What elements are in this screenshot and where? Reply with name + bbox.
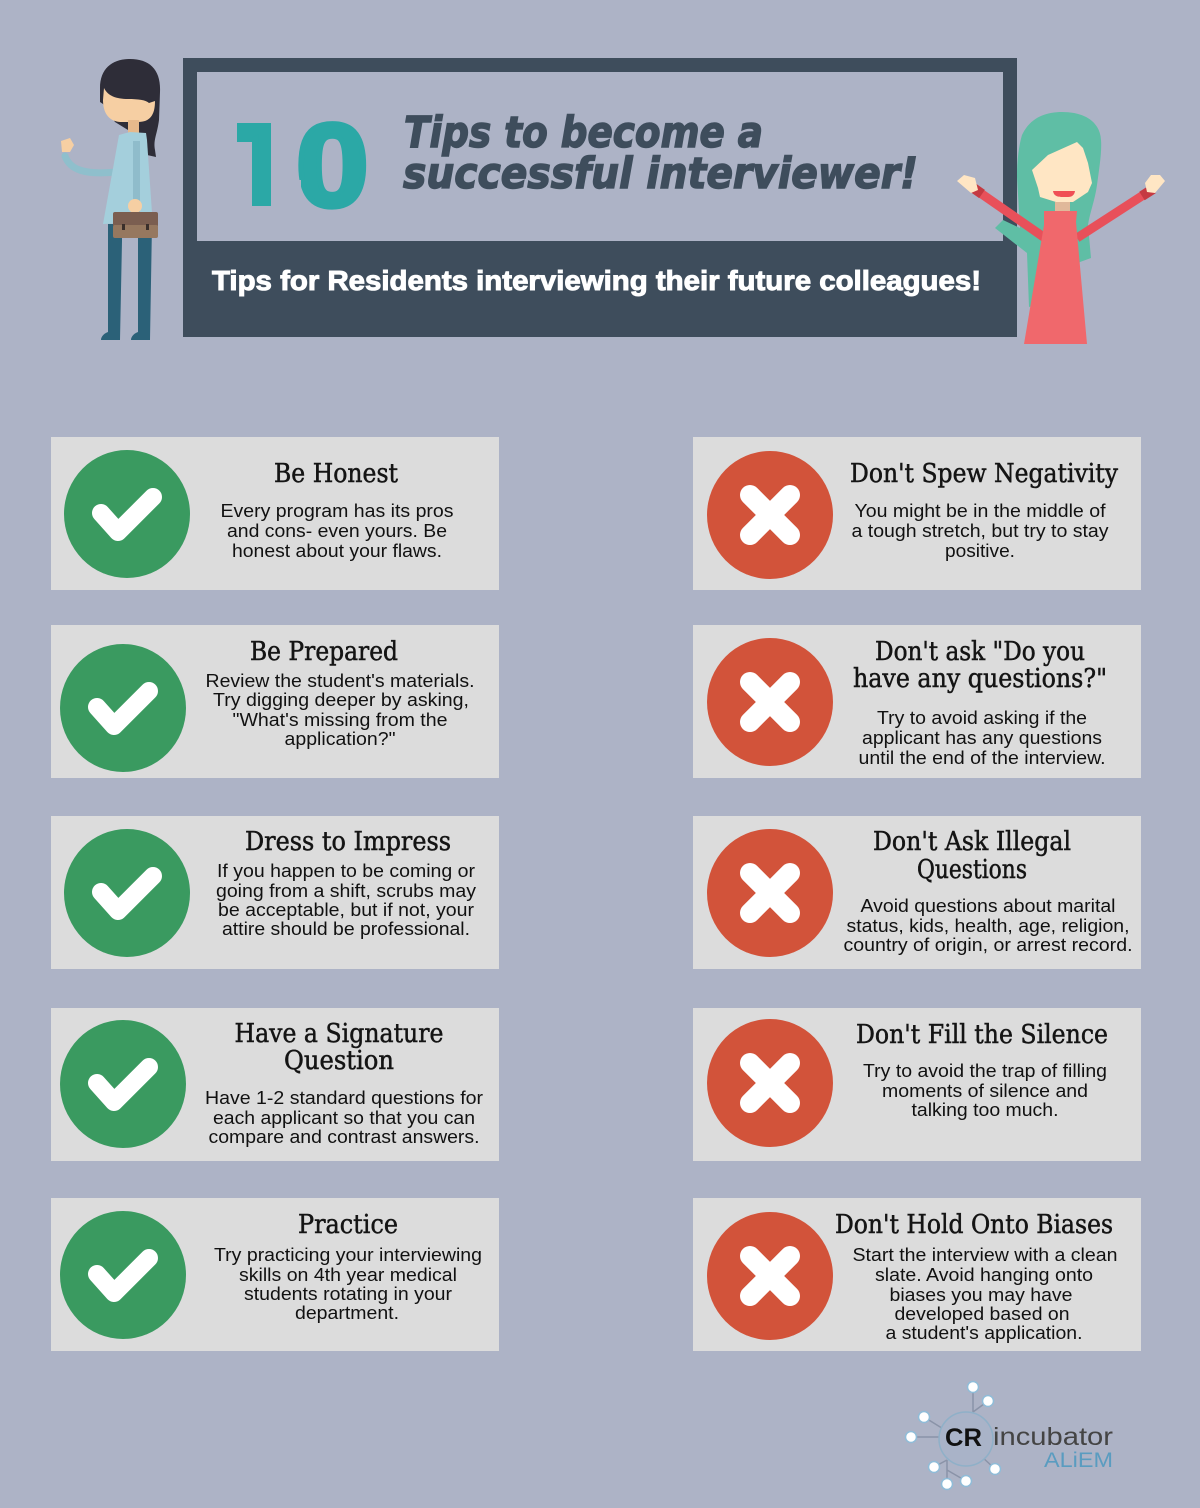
character: woman with briefcase — [61, 59, 160, 340]
tip panel: Don't Hold Onto Biases: developed based on — [894, 1304, 1070, 1324]
tip panel: Don't Ask Illegal Questions: status, kids, health, age, religion, — [846, 916, 1130, 936]
header banner frame — [183, 58, 1017, 337]
logo: CR incubator ALiEM: CR — [945, 1424, 982, 1452]
title text: Tips to become a — [404, 108, 763, 158]
tip panel: Don't ask "Do you have any questions?": Don't ask "Do you — [875, 637, 1085, 667]
tip panel: Don't Spew Negativity: Don't Spew Negativity — [850, 459, 1118, 489]
tip panel: Have a Signature Question: Question — [284, 1046, 394, 1076]
tip panel: Don't ask "Do you have any questions?": until the end of the interview. — [858, 748, 1106, 768]
tip panel: Have a Signature Question: each applicant so that you can — [213, 1108, 475, 1128]
tip panel: Be Honest: Be Honest — [274, 459, 398, 489]
tip panel: Don't Ask Illegal Questions: Questions — [917, 855, 1027, 885]
tip panel: Don't Spew Negativity — [693, 437, 1141, 590]
logo: CR incubator ALiEM — [906, 1382, 1113, 1490]
tip panel: Be Prepared: Try digging deeper by asking, — [213, 690, 469, 710]
tip panel: Dress to Impress: going from a shift, scrubs may — [216, 881, 476, 901]
tip panel: Dress to Impress: be acceptable, but if not, your — [218, 900, 474, 920]
tip panel: Don't Ask Illegal Questions — [693, 816, 1141, 969]
tip panel: Don't Fill the Silence: talking too much. — [912, 1100, 1058, 1120]
tip panel: Don't Fill the Silence: Don't Fill the Silence — [856, 1020, 1108, 1050]
tip panel: Practice — [51, 1198, 499, 1351]
tip panel: Be Honest: and cons- even yours. Be — [227, 521, 447, 541]
title text: successful interviewer! — [403, 149, 918, 199]
tip panel: Dress to Impress — [51, 816, 499, 969]
tip panel: Don't ask "Do you have any questions?": have any questions?" — [853, 664, 1107, 694]
logo: CR incubator ALiEM: incubator — [993, 1423, 1113, 1451]
tip panel: Don't Hold Onto Biases — [693, 1198, 1141, 1351]
tip panel: Practice: skills on 4th year medical — [239, 1265, 457, 1285]
tip panel: Don't Ask Illegal Questions: country of origin, or arrest record. — [844, 935, 1132, 955]
tip panel: Have a Signature Question — [51, 1008, 499, 1161]
tip panel: Don't Hold Onto Biases: Don't Hold Onto Biases — [835, 1210, 1113, 1240]
title number 10: 10 — [225, 100, 369, 232]
tip panel: Don't Spew Negativity: positive. — [945, 541, 1015, 561]
subtitle: Tips for Residents interviewing their future colleagues! — [212, 265, 981, 296]
logo: CR incubator ALiEM: ALiEM — [1044, 1449, 1113, 1472]
tip panel: Have a Signature Question: Have a Signature — [234, 1019, 444, 1049]
tip panel: Don't Hold Onto Biases: a student's application. — [886, 1323, 1082, 1343]
tip panel: Don't Fill the Silence — [693, 1008, 1141, 1161]
tip panel: Be Prepared: Be Prepared — [250, 637, 398, 667]
tip panel: Practice: students rotating in your — [244, 1284, 452, 1304]
tip panel: Don't Fill the Silence: Try to avoid the trap of filling — [863, 1061, 1107, 1081]
tip panel: Be Honest: honest about your flaws. — [232, 541, 442, 561]
title number 10 — [237, 121, 366, 210]
tip panel: Be Prepared: application?" — [284, 729, 396, 749]
tip panel: Be Prepared: Review the student's materials. — [206, 671, 474, 691]
tip panel: Don't Hold Onto Biases: Start the interview with a clean — [852, 1245, 1118, 1265]
character: woman cheering — [957, 112, 1165, 344]
tip panel: Practice: department. — [295, 1303, 399, 1323]
tip panel: Don't ask "Do you have any questions?": applicant has any questions — [862, 728, 1102, 748]
tip panel: Don't Ask Illegal Questions: Avoid questions about marital — [860, 896, 1116, 916]
tip panel: Be Prepared: "What's missing from the — [232, 710, 448, 730]
tip panel: Don't Spew Negativity: You might be in the middle of — [854, 501, 1107, 521]
tip panel: Be Honest — [51, 437, 499, 590]
tip panel: Don't ask "Do you have any questions?": Try to avoid asking if the — [877, 708, 1087, 728]
tip panel: Be Prepared — [51, 625, 499, 778]
title text — [403, 108, 918, 199]
tip panel: Don't ask "Do you have any questions?" — [693, 625, 1141, 778]
tip panel: Don't Ask Illegal Questions: Don't Ask Illegal — [873, 827, 1071, 857]
tip panel: Don't Hold Onto Biases: biases you may have — [890, 1285, 1072, 1305]
tip panel: Don't Fill the Silence: moments of silence and — [882, 1081, 1088, 1101]
tip panel: Don't Spew Negativity: a tough stretch, but try to stay — [852, 521, 1108, 541]
tip panel: Have a Signature Question: Have 1-2 standard questions for — [205, 1088, 483, 1108]
tip panel: Have a Signature Question: compare and contrast answers. — [208, 1127, 480, 1147]
tip panel: Practice: Practice — [298, 1210, 398, 1240]
tip panel: Practice: Try practicing your interviewing — [214, 1245, 482, 1265]
tip panel: Be Honest: Every program has its pros — [220, 501, 454, 521]
tip panel: Dress to Impress: attire should be professional. — [222, 919, 470, 939]
tip panel: Dress to Impress: If you happen to be coming or — [217, 861, 475, 881]
tip panel: Don't Hold Onto Biases: slate. Avoid hanging onto — [875, 1265, 1093, 1285]
tip panel: Dress to Impress: Dress to Impress — [245, 827, 451, 857]
